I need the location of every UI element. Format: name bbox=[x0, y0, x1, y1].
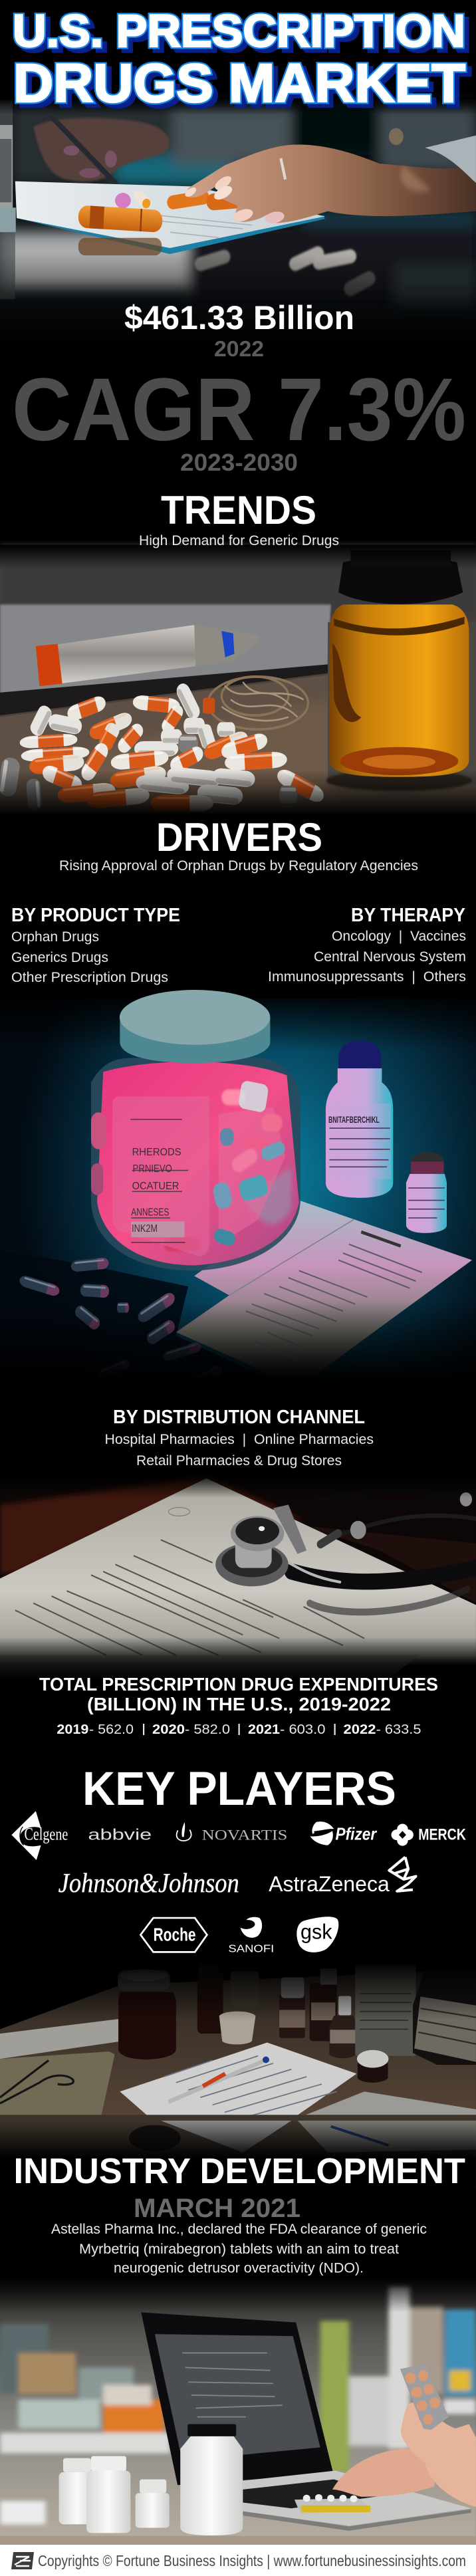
panel: pharmacy desk photo bbox=[0, 1961, 476, 2190]
metal coil bbox=[208, 677, 308, 729]
logo: Roche bbox=[140, 1918, 207, 1952]
logo: Roche: Roche bbox=[154, 1925, 196, 1944]
heading: BY THERAPY bbox=[351, 905, 465, 926]
jar label text: RHERODS bbox=[132, 1147, 181, 1158]
paper bbox=[0, 1478, 476, 1702]
scissors bbox=[0, 2060, 73, 2103]
logo: AstraZeneca: AstraZeneca bbox=[269, 1872, 390, 1896]
title: DRUGS MARKET bbox=[13, 53, 465, 114]
stethoscope chest piece bbox=[215, 1492, 472, 1586]
logo: Novartis bbox=[177, 1822, 287, 1843]
development description bbox=[51, 2222, 427, 2276]
table edge bbox=[0, 2536, 476, 2545]
expenditures by year: - 603.0 bbox=[280, 1722, 326, 1737]
title: DRUGS MARKET bbox=[13, 53, 465, 114]
expenditures by year: 2022 bbox=[343, 1722, 376, 1737]
documents bbox=[176, 1201, 472, 1387]
drivers heading: DRIVERS bbox=[156, 815, 322, 860]
logo: AstraZeneca bbox=[269, 1857, 416, 1896]
fade behind expenditures bbox=[0, 1637, 476, 1931]
panel: footer bbox=[0, 2545, 476, 2576]
jar label text: INK2M bbox=[132, 1223, 158, 1234]
item: Central Nervous System bbox=[314, 949, 466, 965]
medium bottle bbox=[326, 1041, 393, 1198]
hands holding blister bbox=[332, 2402, 476, 2507]
small bottle bbox=[406, 1152, 447, 1233]
laptop bbox=[141, 2312, 471, 2531]
logo: Pfizer: Pfizer bbox=[336, 1824, 378, 1844]
development description: Astellas Pharma Inc., declared the FDA clearance of generic bbox=[51, 2222, 427, 2237]
trends heading: TRENDS bbox=[161, 488, 316, 532]
table surface bbox=[0, 1970, 476, 2190]
expenditures by year: - 582.0 bbox=[185, 1722, 230, 1737]
drivers text: Rising Approval of Orphan Drugs by Regulatory Agencies bbox=[59, 858, 418, 874]
left hand and pen bbox=[33, 107, 170, 183]
scattered dark capsules bbox=[19, 1257, 249, 1403]
logo: Pfizer bbox=[310, 1821, 378, 1845]
jar label text: PRNIEVO bbox=[133, 1163, 172, 1175]
expenditures heading: (BILLION) IN THE U.S., 2019-2022 bbox=[87, 1694, 391, 1714]
heading: BY PRODUCT TYPE bbox=[11, 905, 180, 926]
faded table remnants bbox=[0, 2115, 476, 2287]
title: U.S. PRESCRIPTION bbox=[13, 5, 465, 57]
jar label text: ANNESES bbox=[131, 1207, 169, 1219]
panel: key players logos bbox=[11, 1811, 466, 1954]
stethoscope tubing bbox=[270, 1491, 476, 1612]
medium bottle label text: BNITAFBERCHIKL bbox=[328, 1114, 380, 1125]
expenditures heading bbox=[39, 1674, 438, 1714]
title: U.S. PRESCRIPTION bbox=[13, 5, 465, 57]
jar lid bbox=[120, 990, 270, 1063]
white cup bbox=[219, 2012, 255, 2044]
item: Retail Pharmacies & Drug Stores bbox=[136, 1453, 342, 1468]
desk background bbox=[0, 544, 476, 833]
expenditures by year bbox=[57, 1722, 421, 1737]
industry development heading: INDUSTRY DEVELOPMENT bbox=[13, 2151, 465, 2191]
blurred background bbox=[0, 102, 476, 306]
logo: Sanofi: SANOFI bbox=[228, 1943, 274, 1954]
background bottles bbox=[197, 1961, 337, 2041]
small white-capped jar bbox=[357, 2050, 388, 2083]
logo: Sanofi bbox=[228, 1917, 274, 1954]
logo: GSK bbox=[297, 1917, 338, 1952]
tablet blister bbox=[400, 2364, 449, 2430]
expenditures heading: TOTAL PRESCRIPTION DRUG EXPENDITURES bbox=[39, 1674, 438, 1695]
central prescription sheets bbox=[120, 2043, 476, 2130]
amber jar bbox=[118, 1969, 176, 2059]
amber bottle bbox=[326, 550, 472, 791]
development description: Myrbetriq (mirabegron) tablets with an aim to treat bbox=[79, 2242, 399, 2257]
item: Other Prescription Drugs bbox=[11, 970, 168, 985]
trends text: High Demand for Generic Drugs bbox=[139, 533, 339, 548]
large bottle bbox=[413, 1970, 476, 2065]
jar label text: OCATUER bbox=[132, 1181, 179, 1192]
logo: Merck bbox=[392, 1824, 466, 1846]
logo: AbbVie: abbvie bbox=[88, 1826, 152, 1843]
logo: GSK: gsk bbox=[300, 1920, 332, 1943]
icon: Fortune Business Insights logo bbox=[11, 2552, 34, 2569]
date: MARCH 2021 bbox=[134, 2194, 300, 2223]
logo: Celgene: Celgene bbox=[25, 1825, 68, 1844]
panel: pills and amber bottle photo bbox=[0, 544, 476, 1131]
panel: industry development photo bbox=[0, 2115, 476, 2545]
panel: by product type bbox=[11, 905, 180, 985]
title bbox=[13, 5, 470, 118]
key players heading: KEY PLAYERS bbox=[82, 1763, 396, 1815]
dropper bottle bbox=[329, 1996, 357, 2058]
yellow blister pack bbox=[295, 2494, 374, 2514]
expenditures by year: 2021 bbox=[248, 1722, 280, 1737]
document on desk bbox=[15, 181, 325, 254]
logo: Novartis: NOVARTIS bbox=[202, 1827, 287, 1843]
base year: 2022 bbox=[214, 336, 264, 361]
capsule pile bbox=[0, 681, 326, 812]
item: Oncology | Vaccines bbox=[332, 929, 466, 944]
panel: by therapy bbox=[268, 905, 466, 985]
orange capsules bbox=[78, 188, 261, 255]
item: Orphan Drugs bbox=[11, 929, 99, 945]
item: Hospital Pharmacies | Online Pharmacies bbox=[105, 1432, 374, 1447]
market value: $461.33 Billion bbox=[124, 299, 354, 336]
blurred pharmacy shelves bbox=[0, 2278, 476, 2545]
expenditures by year: 2020 bbox=[152, 1722, 185, 1737]
panel: by distribution channel bbox=[105, 1407, 374, 1468]
panel: hero photo of hands, prescription and capsules bbox=[0, 97, 476, 356]
development description: neurogenic detrusor overactivity (NDO). bbox=[114, 2260, 364, 2276]
panel: pink jar photo bbox=[0, 990, 476, 1476]
expenditures by year: - 633.5 bbox=[376, 1722, 421, 1737]
jar label text bbox=[131, 1147, 181, 1234]
reflected capsules on table bbox=[193, 244, 378, 298]
clipboard bbox=[0, 2019, 122, 2059]
hand with ring bbox=[184, 128, 476, 225]
cloth pouch bbox=[0, 2051, 115, 2121]
expenditures by year: - 562.0 bbox=[89, 1722, 134, 1737]
pen tube bbox=[36, 625, 259, 686]
title: DRUGS MARKET bbox=[18, 57, 470, 118]
expenditures by year: 2019 bbox=[57, 1722, 88, 1737]
vial at left edge bbox=[0, 100, 16, 299]
heading: BY DISTRIBUTION CHANNEL bbox=[113, 1407, 365, 1428]
dark lower table bbox=[0, 1251, 297, 1392]
logo: Celgene bbox=[11, 1811, 68, 1860]
white medicine bottles bbox=[59, 2424, 243, 2535]
teal backdrop bbox=[0, 998, 476, 1395]
item: Immunosuppressants | Others bbox=[268, 969, 466, 985]
title: U.S. PRESCRIPTION bbox=[17, 9, 470, 60]
forecast period: 2023-2030 bbox=[180, 449, 298, 476]
logo: Johnson & Johnson: Johnson&Johnson bbox=[59, 1867, 239, 1898]
glass jar with pink capsules bbox=[91, 1058, 300, 1270]
carton bbox=[355, 1964, 416, 2056]
item: Generics Drugs bbox=[11, 950, 108, 965]
panel: stethoscope on document photo bbox=[0, 1473, 476, 1702]
